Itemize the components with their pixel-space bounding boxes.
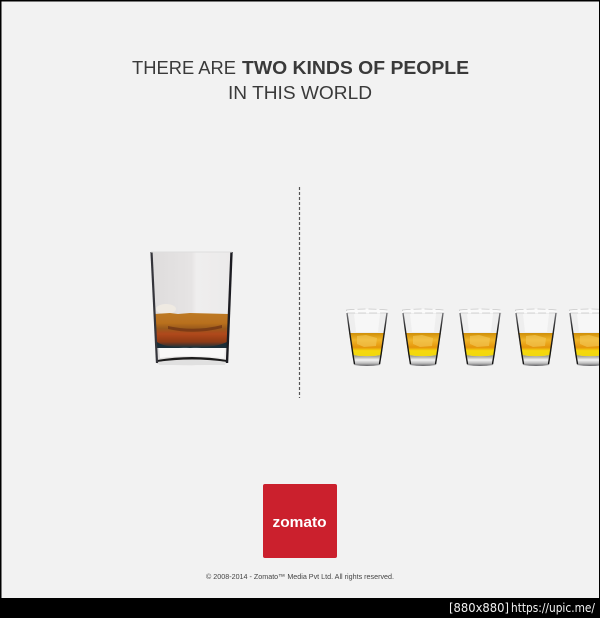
copyright line: © 2008-2014 - Zomato™ Media Pvt Ltd. All rights reserved. (206, 572, 394, 581)
title: IN THIS WORLD (228, 82, 372, 103)
zomato logo (263, 484, 337, 558)
right edge of frame (599, 0, 600, 598)
icon: small whisky glass 4 (515, 309, 557, 366)
icon: small whisky glass 1 (346, 309, 388, 366)
title (132, 57, 469, 103)
title: TWO KINDS OF PEOPLE (242, 57, 469, 78)
title: THERE ARE (132, 57, 236, 78)
dashed divider (298, 187, 300, 398)
watermark bar (0, 598, 600, 618)
icon: large whisky glass (151, 252, 232, 366)
icon: small whisky glass 2 (402, 309, 444, 366)
zomato logo: zomato (272, 514, 326, 531)
icon: small whisky glass 5, cut off at edge (569, 309, 600, 366)
icon: small whisky glass 3 (459, 309, 501, 366)
watermark bar: [880x880] (449, 601, 509, 615)
